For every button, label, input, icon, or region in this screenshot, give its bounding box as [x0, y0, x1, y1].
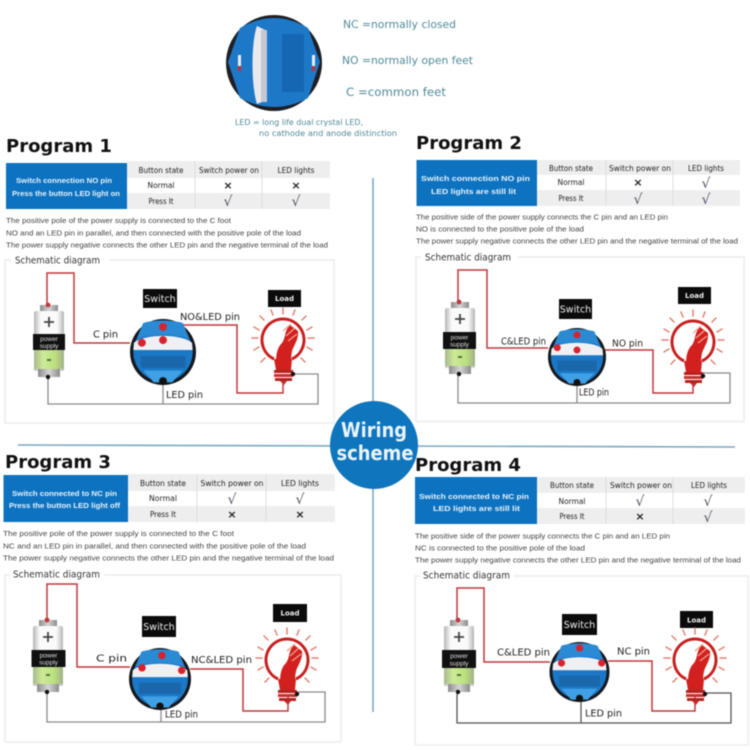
table: program 4: √: [636, 494, 645, 510]
label: load: [678, 287, 711, 304]
description: program 3: The power supply negative connects the other LED pin and the negative terminal of the load: [3, 554, 334, 562]
table: program 1: LED lights: [278, 166, 315, 175]
pin labels: LED pin: [165, 710, 198, 720]
table: program 2: Button state: [549, 164, 593, 173]
table: program 4: LED lights are still lit: [433, 504, 521, 513]
pin labels: NC pin: [617, 646, 650, 658]
positive wire: [458, 270, 548, 348]
pin labels: C&LED pin: [497, 648, 550, 658]
legend: LED note: [235, 118, 397, 138]
pin labels: LED pin: [585, 708, 622, 720]
icon: bulb: [256, 628, 318, 705]
table: program 2: LED lights are still lit: [431, 187, 517, 196]
schematic: program 4: Schematic diagram: [423, 570, 510, 582]
pin labels: [93, 312, 240, 401]
table: program 2: ×: [633, 176, 643, 189]
pin labels: LED pin: [579, 388, 609, 398]
label: switch: Switch: [560, 304, 591, 316]
pin labels: NC&LED pin: [191, 655, 252, 666]
icon: switch: [130, 319, 196, 385]
table: program 2: Normal: [558, 178, 584, 187]
pin labels: NO&LED pin: [180, 312, 240, 323]
icon: battery: supply: [40, 343, 59, 350]
icon: battery: [33, 303, 65, 379]
table: program 1: Switch connection NO pin: [16, 176, 112, 185]
table: program 4: Button state: [550, 481, 594, 490]
label: switch: [142, 616, 176, 637]
schematic: program 2: [416, 251, 744, 422]
label: load: Load: [685, 292, 704, 300]
panel: program 4: [415, 455, 748, 745]
label: load: [273, 604, 307, 622]
table: program 3: Normal: [149, 494, 177, 503]
table: program 2: Switch power on: [609, 164, 671, 173]
icon: battery: [442, 618, 476, 694]
table: program 3: ×: [295, 508, 305, 521]
table: program 3: √: [228, 492, 237, 508]
table: program 3: LED lights: [281, 479, 319, 488]
icon: push button rear view: [226, 15, 322, 111]
pin labels: C pin: [93, 330, 118, 340]
table: program 2: √: [634, 192, 643, 208]
table: program 1: [6, 161, 330, 210]
label: load: Load: [275, 295, 294, 303]
positive wire: [457, 588, 550, 662]
heading: program 4: Program 4: [415, 455, 521, 476]
description: program 4: The power supply negative connects the other LED pin and the negative terminal of the load: [415, 556, 741, 564]
negative wire: [457, 693, 731, 723]
description: program 2: NO is connected to the positive pole of the load: [416, 224, 584, 234]
table: program 1: Press the button LED light on: [12, 189, 120, 198]
pin labels: LED pin: [166, 390, 203, 401]
description: program 1: The positive pole of the power supply is connected to the C foot: [6, 216, 232, 225]
table: program 1: ×: [291, 179, 301, 192]
table: program 3: ×: [227, 508, 237, 521]
table: program 1: ×: [223, 179, 233, 192]
pin labels: C pin: [96, 654, 127, 664]
icon: battery: power: [450, 653, 469, 660]
panel: header legend: [226, 15, 474, 138]
table: program 1: Button state: [138, 166, 184, 175]
icon: bulb: [252, 308, 314, 385]
panel: program 1: [5, 136, 334, 423]
description: program 2: [416, 212, 738, 246]
schematic: program 2: Schematic diagram: [425, 252, 511, 264]
table: program 3: √: [296, 492, 305, 508]
description: program 4: The positive side of the power supply connects the C pin and an LED pin: [415, 532, 670, 540]
label: switch: Switch: [143, 622, 175, 633]
pin labels: NO pin: [612, 338, 643, 350]
table: program 1: Normal: [148, 181, 174, 190]
pin labels: [497, 646, 650, 720]
table: program 4: Press It: [560, 512, 585, 521]
badge: wiring scheme: [330, 401, 418, 489]
label: load: Load: [280, 610, 300, 618]
badge: wiring scheme: Wiring: [341, 418, 407, 442]
negative wire: [48, 374, 318, 404]
description: program 3: [3, 529, 334, 562]
label: switch: Switch: [144, 294, 176, 305]
label: switch: [562, 614, 597, 635]
description: program 1: [6, 216, 328, 250]
icon: bulb: [664, 628, 726, 705]
description: program 1: The power supply negative connects the other LED pin and the negative terminal of the load: [6, 240, 328, 250]
table: program 3: Press the button LED light off: [9, 501, 121, 510]
table: program 1: √: [292, 194, 301, 210]
positive wire: [47, 584, 130, 667]
description: program 1: NO and an LED pin in parallel, and then connected with the positive pole of the load: [6, 228, 301, 238]
icon: switch: [129, 648, 191, 710]
negative wire: [458, 373, 730, 403]
icon: battery: supply: [450, 660, 469, 668]
badge: wiring scheme: scheme: [336, 441, 414, 465]
table: program 3: [4, 474, 335, 522]
panel: program 3: [3, 452, 341, 742]
schematic: program 1: [5, 254, 334, 423]
legend: NC: NC =normally closed: [343, 18, 456, 31]
negative wire: [47, 692, 325, 722]
pin labels: C&LED pin: [501, 336, 546, 348]
description: program 4: [415, 532, 741, 564]
label: switch: Switch: [564, 620, 595, 631]
table: program 2: √: [702, 192, 711, 208]
pin labels: [501, 336, 643, 398]
table: program 4: √: [704, 494, 713, 510]
schematic: program 3: Schematic diagram: [13, 570, 100, 580]
label: load: [680, 611, 713, 628]
icon: battery: supply: [450, 342, 470, 348]
icon: battery: power: [40, 652, 58, 660]
icon: battery: [32, 618, 66, 694]
table: program 3: Switch power on: [200, 479, 264, 488]
label: load: [268, 290, 301, 307]
table: program 3: Button state: [140, 479, 186, 488]
table: program 3: Press It: [150, 510, 176, 519]
legend: LED note: LED = long life dual crystal LED,: [235, 118, 363, 127]
label: switch: [559, 299, 592, 319]
table: program 4: Switch connected to NC pin: [419, 492, 529, 501]
schematic: program 3: [5, 569, 341, 742]
table: program 4: Normal: [558, 497, 586, 506]
table: program 4: [415, 477, 745, 526]
schematic: program 4: [415, 570, 748, 745]
table: program 2: Press It: [558, 194, 584, 203]
description: program 2: The power supply negative connects the other LED pin and the negative terminal of the load: [416, 236, 738, 246]
table: program 1: Press It: [148, 197, 174, 206]
heading: program 1: Program 1: [6, 136, 112, 157]
divider cross: [18, 178, 735, 712]
load wire: [608, 661, 695, 711]
panel: program 2: [416, 133, 744, 422]
table: program 4: Switch power on: [610, 481, 672, 490]
table: program 1: Switch power on: [199, 166, 259, 175]
icon: switch: [550, 642, 610, 702]
description: program 3: The positive pole of the power supply is connected to the C foot: [3, 529, 235, 538]
icon: battery: power: [40, 336, 59, 343]
icon: battery: supply: [39, 660, 59, 666]
load wire: [190, 669, 288, 711]
legend: LED note: no cathode and anode distinction: [259, 129, 397, 138]
label: switch: [143, 289, 177, 308]
table: program 4: LED lights: [691, 481, 727, 490]
table: program 2: Switch connection NO pin: [421, 174, 530, 183]
description: program 3: NC and an LED pin in parallel, and then connected with the positive pole of the load: [3, 542, 306, 550]
icon: battery: [443, 300, 476, 376]
table: program 2: LED lights: [688, 164, 724, 173]
table: program 2: √: [702, 176, 711, 192]
load wire: [180, 325, 283, 393]
table: program 1: √: [224, 194, 233, 210]
heading: program 2: Program 2: [416, 133, 522, 154]
icon: bulb: [662, 310, 724, 387]
icon: battery: power: [451, 334, 469, 342]
heading: program 3: Program 3: [5, 452, 111, 473]
description: program 2: The positive side of the power supply connects the C pin and an LED pin: [416, 212, 668, 222]
icon: switch: [548, 328, 606, 386]
description: program 4: NC is connected to the positive pole of the load: [415, 544, 585, 552]
table: program 4: √: [704, 510, 713, 526]
pin labels: [96, 654, 252, 720]
schematic: program 1: Schematic diagram: [15, 256, 100, 266]
table: program 3: Switch connected to NC pin: [12, 489, 117, 498]
positive wire: [47, 273, 130, 343]
label: load: Load: [687, 616, 706, 624]
legend: NO: NO =normally open feet: [342, 54, 474, 67]
table: program 4: ×: [635, 510, 645, 523]
load wire: [605, 350, 693, 393]
table: program 2: [416, 160, 740, 208]
legend: C: C =common feet: [346, 85, 446, 99]
